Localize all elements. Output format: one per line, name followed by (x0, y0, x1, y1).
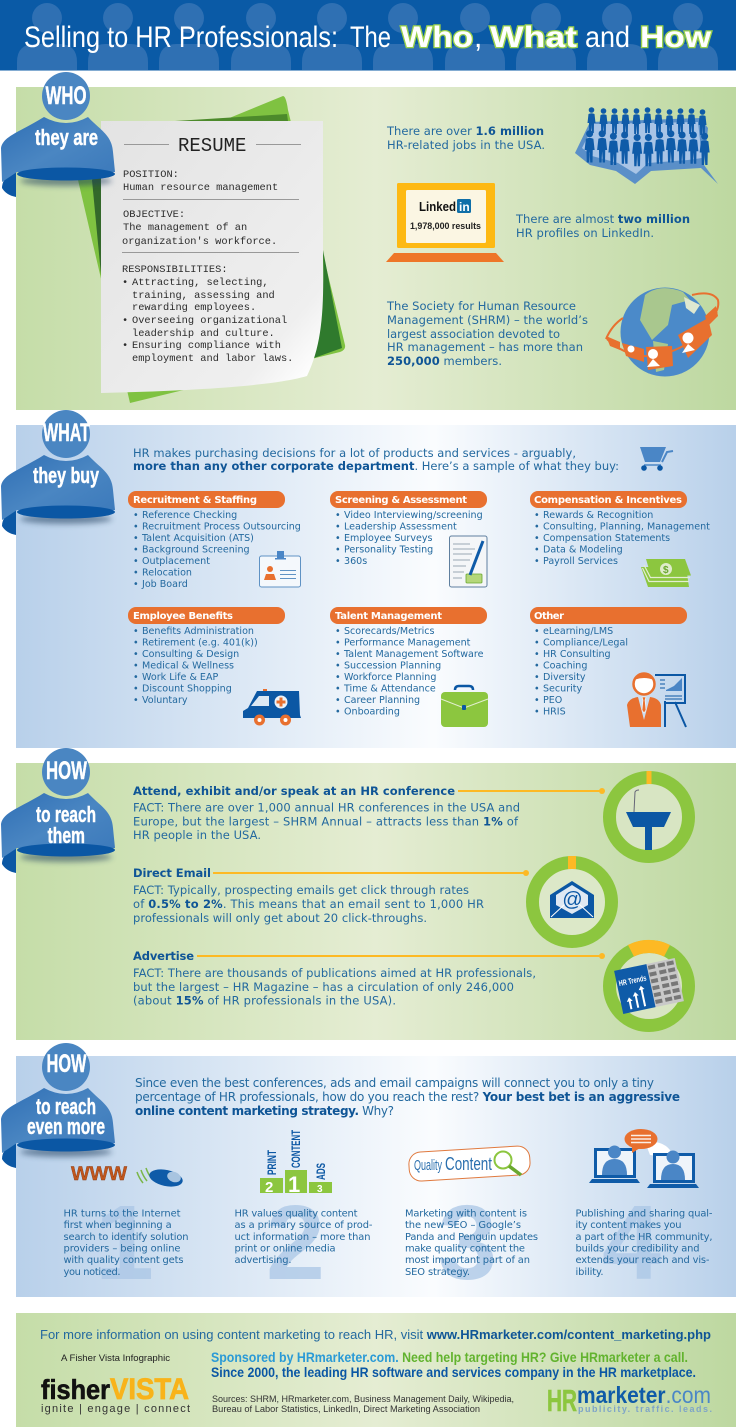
category: other: HR Consulting (543, 649, 611, 660)
resume body text: organization's workforce. (122, 236, 277, 248)
icon: briefcase (441, 686, 488, 727)
category: talent management: • (335, 649, 341, 660)
category: talent management: • (335, 660, 341, 672)
fact: LinkedIn profiles: There are almost two million (515, 212, 690, 226)
badge: how to reach them: to reach (36, 802, 96, 827)
badge: who they are: WHO (46, 82, 86, 110)
icon: HR Trends magazine in ring (610, 940, 688, 1026)
category: recruitment and staffing: • (133, 522, 139, 532)
fact: SHRM: Management (SHRM) – the world’s (387, 313, 588, 327)
column 4 text: Publishing and sharing qual- (576, 1208, 713, 1220)
title: and (585, 21, 630, 54)
tactic: conference: FACT: There are over 1,000 annual HR conferences in the USA and (133, 800, 520, 814)
resume body text: POSITION: (123, 169, 179, 181)
logo: HRmarketer: marketer.com (577, 1382, 711, 1408)
column 3 text (405, 1208, 538, 1278)
category: employee benefits (128, 607, 285, 706)
column 3 text: Marketing with content is (405, 1208, 527, 1220)
badge: what they buy (1, 410, 115, 535)
column 4 text: ity content makes you (576, 1220, 682, 1231)
resume body text: Attracting, selecting, (132, 277, 269, 289)
resume body text: training, assessing and (132, 290, 275, 302)
tactic: advertise: but the largest – HR Magazine – has a circulation of only 246,000 (133, 980, 514, 994)
icon: laptop with LinkedIn results (386, 183, 504, 262)
icon: content podium: 3 (317, 1184, 323, 1195)
resume body text: • (122, 315, 128, 327)
category: compensation and incentives: Compensation Statements (543, 533, 670, 544)
category: recruitment and staffing (128, 491, 301, 590)
column 2 text: print or online media (234, 1244, 336, 1254)
category: talent management: • (335, 684, 341, 694)
icon: content podium: 2 (265, 1179, 273, 1196)
intro text (133, 446, 619, 473)
category: recruitment and staffing: • (133, 568, 139, 578)
sources: Bureau of Labor Statistics, LinkedIn, Direct Marketing Association (212, 1404, 480, 1414)
tactic: direct email (133, 866, 529, 925)
icon: email envelope in ring (532, 856, 612, 942)
category: employee benefits: Employee Benefits (133, 611, 233, 622)
tactic: advertise: (about 15% of HR professionals in the USA). (133, 994, 396, 1008)
title: How (640, 21, 712, 54)
column 1 text (64, 1208, 188, 1278)
big numerals: 4 (602, 1184, 661, 1302)
category: compensation and incentives: • (534, 533, 540, 544)
resume heading: RESUME (178, 135, 246, 157)
fact: SHRM: HR management – has more than (387, 340, 583, 354)
category: screening and assessment: • (335, 522, 341, 532)
category: screening and assessment: Employee Surveys (344, 533, 433, 544)
icon: quality content magnifier: Content (445, 1154, 492, 1174)
panel: how to reach them (16, 763, 736, 1040)
resume sheet (101, 121, 323, 393)
category: other: • (534, 672, 540, 683)
category: screening and assessment: Video Interviewing/screening (344, 510, 483, 521)
category: employee benefits: Retirement (e.g. 401(k)) (142, 638, 258, 648)
category: employee benefits: Benefits Administration (142, 626, 254, 637)
tactic: advertise: Advertise (133, 949, 194, 963)
category: screening and assessment: Screening & Assessment (335, 495, 467, 506)
fact: SHRM: 250,000 members. (387, 354, 502, 368)
category: recruitment and staffing: Job Board (141, 579, 188, 590)
resume body text: OBJECTIVE: (123, 209, 185, 221)
sponsor message (211, 1349, 696, 1380)
category: recruitment and staffing: • (133, 556, 139, 567)
category: talent management: • (335, 695, 341, 706)
sources: Sources: SHRM, HRmarketer.com, Business Management Daily, Wikipedia, (212, 1394, 514, 1404)
tactic: advertise: FACT: There are thousands of publications aimed at HR professionals, (133, 966, 536, 980)
resume body text: leadership and culture. (132, 328, 275, 340)
big numerals (95, 1184, 661, 1302)
category: screening and assessment (330, 491, 487, 567)
category: compensation and incentives (530, 491, 710, 567)
category: other: • (534, 684, 540, 694)
icon: shopping cart (640, 447, 673, 471)
title: The (350, 21, 391, 54)
category: other: • (534, 638, 540, 648)
column 4 text: extends your reach and vis- (576, 1255, 710, 1266)
category: talent management: Performance Management (344, 638, 471, 648)
category: employee benefits: • (133, 684, 139, 694)
category: compensation and incentives: Consulting, Planning, Management (543, 522, 710, 532)
sources (212, 1394, 514, 1414)
category: recruitment and staffing: Recruitment & Staffing (133, 495, 257, 506)
resume body text: RESPONSIBILITIES: (122, 264, 228, 276)
category: other: Compliance/Legal (543, 638, 628, 648)
badge: what they buy: WHAT (43, 419, 90, 447)
category: talent management: • (335, 638, 341, 648)
category: recruitment and staffing: Relocation (142, 568, 192, 578)
title: What (490, 21, 577, 54)
column 1 text: HR turns to the Internet (64, 1208, 181, 1220)
icon: ID badge (260, 551, 300, 587)
category: screening and assessment: Leadership Assessment (344, 522, 457, 532)
icon: podium in ring (610, 771, 688, 856)
resume body text: Ensuring compliance with (132, 340, 281, 352)
icon: content podium: PRINT (265, 1150, 279, 1175)
category: other: • (534, 660, 540, 672)
column 4 text: a part of the HR community, (576, 1232, 712, 1243)
fact: HR jobs: There are over 1.6 million (386, 124, 544, 138)
category: employee benefits: Medical & Wellness (142, 660, 234, 672)
column 1 text: with quality content gets (64, 1255, 184, 1266)
category: compensation and incentives: • (534, 544, 540, 556)
category: employee benefits: Voluntary (142, 695, 188, 706)
column 1 text: providers – being online (64, 1244, 180, 1254)
column 1 text: you noticed. (64, 1267, 120, 1278)
panel: what they buy (16, 425, 736, 748)
intro text: HR makes purchasing decisions for a lot of products and services - arguably, (133, 446, 576, 460)
category: talent management: Onboarding (344, 706, 400, 718)
fact: HR jobs: HR-related jobs in the USA. (387, 138, 545, 152)
intro text (135, 1076, 680, 1118)
credit line: A Fisher Vista Infographic (61, 1353, 170, 1364)
sponsor message: Sponsored by HRmarketer.com. Need help targeting HR? Give HRmarketer a call. (211, 1349, 688, 1365)
category: other: • (534, 649, 540, 660)
resume body text: Human resource management (123, 182, 278, 194)
category: screening and assessment: Personality Testing (344, 544, 433, 556)
intro text: online content marketing strategy. Why? (135, 1104, 394, 1118)
icon: quality content magnifier: Quality (414, 1157, 442, 1174)
category: recruitment and staffing: • (133, 510, 139, 521)
title (24, 21, 712, 54)
column 4 text: ibility. (576, 1267, 604, 1278)
green sheet behind resume (78, 96, 345, 403)
category: other: eLearning/LMS (543, 626, 613, 637)
category: compensation and incentives: Payroll Services (543, 556, 618, 567)
icon: laptop with LinkedIn results: in (459, 200, 470, 214)
category: other: • (534, 706, 540, 718)
logo: HRmarketer: HR (547, 1383, 577, 1418)
badge: how to reach them (1, 748, 115, 873)
big numerals: 2 (266, 1184, 325, 1302)
icon: laptop with LinkedIn results: Linked (419, 199, 456, 214)
column 4 text (576, 1208, 713, 1278)
category: employee benefits: • (133, 638, 139, 648)
category: talent management: Scorecards/Metrics (344, 626, 435, 637)
title: , (474, 21, 482, 54)
resume body text: rewarding employees. (132, 302, 256, 314)
badge: how to reach them: them (48, 823, 85, 848)
resume body text: Overseeing organizational (132, 315, 287, 327)
category: talent management: Talent Management Software (343, 649, 484, 660)
badge: who they are (1, 72, 115, 197)
category: other (530, 607, 687, 718)
header banner (0, 0, 736, 70)
icon: stack of money: $ (663, 565, 669, 576)
icon: ambulance (243, 689, 301, 726)
category: compensation and incentives: • (534, 556, 540, 567)
tactic: conference (133, 784, 605, 842)
badge: what they buy: they buy (33, 463, 100, 488)
tactic: direct email: of 0.5% to 2%. This means that an email sent to 1,000 HR (133, 897, 484, 911)
category: employee benefits: Discount Shopping (142, 684, 232, 694)
category: compensation and incentives: Rewards & Recognition (543, 510, 653, 521)
logo: fisher vista: ignite | engage | connect (41, 1403, 190, 1415)
category: recruitment and staffing: Talent Acquisition (ATS) (141, 533, 254, 544)
big numerals: 1 (95, 1184, 154, 1302)
category: talent management: Workforce Planning (344, 672, 436, 683)
column 1 text: first when beginning a (64, 1220, 172, 1231)
tactic: conference: HR people in the USA. (133, 828, 261, 842)
badge: how to reach even more: HOW (46, 1050, 87, 1078)
resume body text: The management of an (123, 222, 247, 234)
badge: how to reach them: HOW (46, 757, 87, 785)
badge: how to reach even more (1, 1043, 115, 1168)
category: employee benefits: • (133, 660, 139, 672)
more information link text: For more information on using content marketing to reach HR, visit www.HRmarketer.com/content_marketing.php (40, 1327, 711, 1342)
category: screening and assessment: • (335, 533, 341, 544)
icon: USA map with people (575, 107, 718, 184)
category: other: Diversity (543, 672, 586, 683)
category: recruitment and staffing: • (133, 544, 139, 556)
category: compensation and incentives: Data & Modeling (543, 544, 623, 556)
badge: how to reach even more: to reach (36, 1094, 96, 1119)
icon: www and mouse: WWW (71, 1164, 127, 1185)
tactic: direct email: professionals will only get about 20 click-throughs. (133, 911, 427, 925)
icon: HR Trends magazine in ring: HR Trends (618, 973, 648, 988)
category: talent management: Succession Planning (344, 660, 441, 672)
fact: LinkedIn profiles (515, 212, 690, 240)
category: talent management: • (335, 626, 341, 637)
tactic: conference: Attend, exhibit and/or speak at an HR conference (133, 784, 455, 798)
category: other: Other (534, 611, 564, 622)
tactic: advertise (133, 949, 605, 1008)
column 2 text (234, 1208, 373, 1266)
panel: footer (16, 1313, 736, 1427)
icon: content podium: 1 (288, 1172, 300, 1197)
category: screening and assessment: 360s (344, 556, 367, 567)
title: Who (401, 21, 473, 54)
logo: fisher vista: VISTA (110, 1373, 189, 1406)
category: screening and assessment: • (335, 510, 341, 521)
column 3 text: SEO strategy. (405, 1267, 470, 1278)
badge: how to reach even more: even more (27, 1114, 105, 1139)
category: compensation and incentives: • (534, 522, 540, 532)
intro text: more than any other corporate department. Here’s a sample of what they buy: (133, 459, 619, 473)
category: talent management: • (335, 672, 341, 683)
category: talent management: Talent Management (335, 611, 442, 622)
column 3 text: Panda and Penguin updates (405, 1232, 538, 1243)
category: talent management: Time & Attendance (343, 684, 436, 694)
category: other: Security (543, 684, 583, 694)
column 2 text: HR values quality content (234, 1208, 358, 1220)
column 3 text: most important part of an (405, 1255, 530, 1266)
icon: content podium: ADS (314, 1163, 328, 1180)
category: employee benefits: • (133, 672, 139, 683)
tactic: direct email: Direct Email (133, 866, 211, 880)
icon: signed form (450, 536, 487, 587)
category: other: HRIS (543, 706, 566, 718)
icon: stack of money (641, 559, 691, 587)
panel: who they are (16, 87, 736, 410)
fact: SHRM: The Society for Human Resource (386, 299, 576, 313)
category: talent management (330, 607, 487, 718)
category: employee benefits: • (133, 695, 139, 706)
icon: www and mouse (71, 1164, 184, 1189)
category: screening and assessment: • (335, 556, 341, 567)
category: talent management: Career Planning (344, 695, 420, 706)
category: other: • (534, 695, 540, 706)
header crowd silhouettes (17, 3, 718, 70)
icon: laptop with LinkedIn results: 1,978,000 results (410, 221, 481, 231)
logo: HRmarketer: publicity. traffic. leads. (578, 1404, 712, 1414)
category: recruitment and staffing: Background Screening (142, 544, 250, 556)
title: Selling to HR Professionals: (24, 21, 338, 54)
resume body text: employment and labor laws. (132, 353, 293, 365)
tactic: direct email: FACT: Typically, prospecting emails get click through rates (133, 883, 469, 897)
logo: fisher vista: fisher (41, 1374, 110, 1405)
column 2 text: advertising. (234, 1255, 292, 1266)
panel: how to reach even more (16, 1056, 736, 1302)
intro text: Since even the best conferences, ads and email campaigns will connect you to only a tiny (135, 1076, 654, 1090)
category: screening and assessment: • (335, 544, 341, 556)
fact: HR jobs (386, 124, 545, 152)
icon: people talking through laptops (589, 1129, 699, 1188)
resume body text: • (122, 277, 128, 289)
icon: presenter with chart (627, 674, 686, 727)
resume body text: • (122, 340, 128, 352)
resume body text (122, 169, 299, 365)
category: other: PEO (543, 695, 562, 706)
icon: content podium: CONTENT (289, 1130, 303, 1168)
fact: LinkedIn profiles: HR profiles on LinkedIn. (516, 226, 654, 240)
category: employee benefits: Consulting & Design (142, 649, 239, 660)
category: compensation and incentives: Compensation & Incentives (534, 495, 682, 506)
icon: globe with ring of people (606, 288, 718, 376)
category: talent management: • (335, 706, 341, 718)
big numerals: 3 (438, 1184, 497, 1302)
column 3 text: make quality content the (405, 1244, 525, 1254)
column 3 text: the new SEO – Google’s (405, 1220, 521, 1231)
category: recruitment and staffing: • (133, 579, 139, 590)
category: other: Coaching (543, 660, 587, 672)
icon: content podium (260, 1130, 332, 1197)
column 2 text: uct information – more than (234, 1232, 370, 1243)
intro text: percentage of HR professionals, how do you reach the rest? Your best bet is an aggressive (135, 1090, 680, 1104)
category: other: • (534, 626, 540, 637)
column 1 text: search to identify solution (64, 1232, 188, 1243)
category: employee benefits: • (133, 649, 139, 660)
icon: email envelope in ring: @ (562, 889, 582, 911)
badge: who they are: they are (35, 125, 98, 150)
logo: HRmarketer (547, 1382, 712, 1418)
category: employee benefits: • (133, 626, 139, 637)
fact: SHRM: largest association devoted to (387, 327, 560, 341)
logo: fisher vista (41, 1373, 190, 1415)
category: recruitment and staffing: Recruitment Process Outsourcing (142, 522, 301, 532)
category: compensation and incentives: • (534, 510, 540, 521)
icon: quality content magnifier (408, 1145, 531, 1182)
column 2 text: as a primary source of prod- (234, 1220, 373, 1231)
category: employee benefits: Work Life & EAP (142, 672, 218, 683)
column 4 text: builds your credibility and (576, 1244, 700, 1254)
tactic: conference: Europe, but the largest – SHRM Annual – attracts less than 1% of (133, 814, 519, 828)
category: recruitment and staffing: Outplacement (142, 556, 210, 567)
fact: SHRM (386, 299, 588, 368)
category: recruitment and staffing: Reference Checking (142, 510, 237, 521)
category: recruitment and staffing: • (133, 533, 139, 544)
